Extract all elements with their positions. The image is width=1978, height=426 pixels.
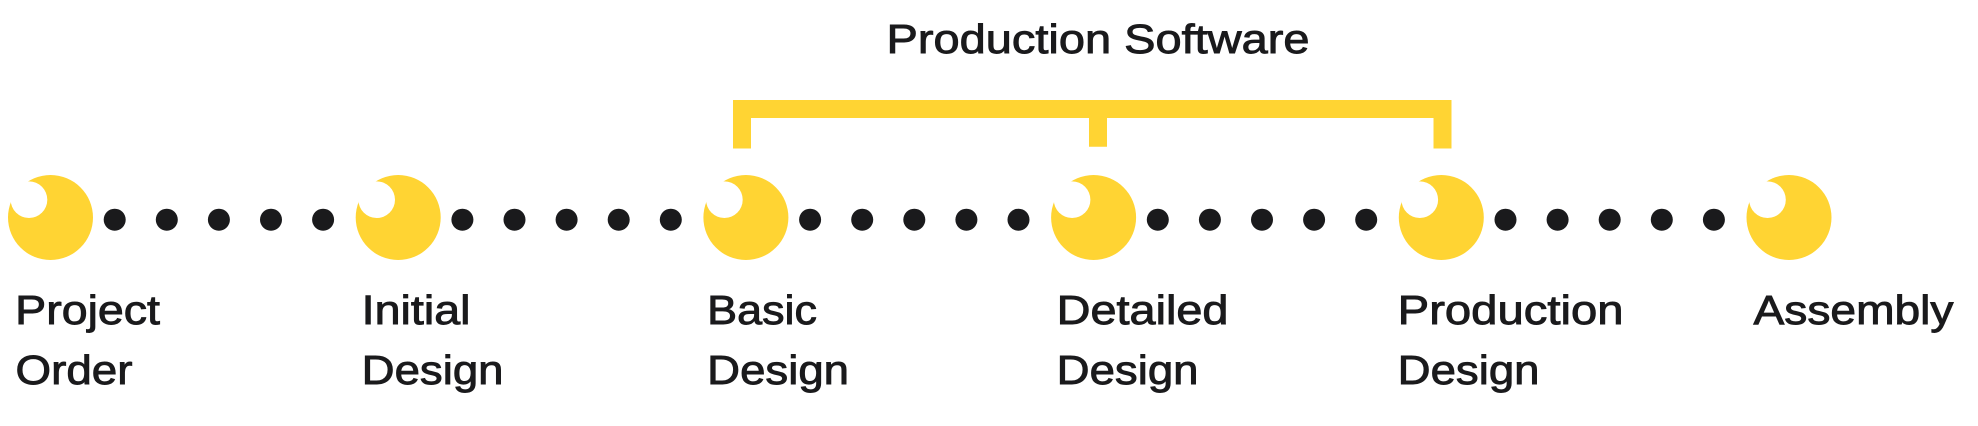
label: Project Order: Order <box>16 347 132 393</box>
dots 5 <box>1494 209 1725 231</box>
step marker: Project Order <box>8 175 93 260</box>
title: Production Software: Production Software <box>886 16 1310 62</box>
label: Detailed Design: Design <box>1057 347 1198 393</box>
label: Detailed Design: Detailed <box>1057 287 1228 333</box>
step marker: Basic Design <box>703 175 788 260</box>
label: Basic Design: Basic <box>707 287 817 333</box>
label: Initial Design: Design <box>362 347 504 393</box>
label: Detailed Design <box>1057 287 1228 393</box>
step marker: Assembly <box>1746 175 1832 260</box>
label: Basic Design: Design <box>707 347 849 393</box>
dots 4 <box>1147 209 1377 231</box>
dots 3 <box>799 209 1030 231</box>
label: Assembly: Assembly <box>1754 287 1954 333</box>
bracket <box>733 100 1452 148</box>
label: Initial Design: Initial <box>362 287 470 333</box>
label: Initial Design <box>362 287 504 393</box>
label: Project Order: Project <box>15 287 161 333</box>
step marker: Detailed Design <box>1051 175 1136 260</box>
step marker: Initial Design <box>356 175 441 260</box>
dots 2 <box>451 209 682 231</box>
step marker: Production Design <box>1399 175 1484 260</box>
label: Production Design <box>1398 287 1624 393</box>
label: Production Design: Production <box>1398 287 1624 333</box>
dots 1 <box>104 209 334 231</box>
label: Project Order <box>15 287 161 393</box>
label: Basic Design <box>707 287 849 393</box>
label: Production Design: Design <box>1398 347 1540 393</box>
